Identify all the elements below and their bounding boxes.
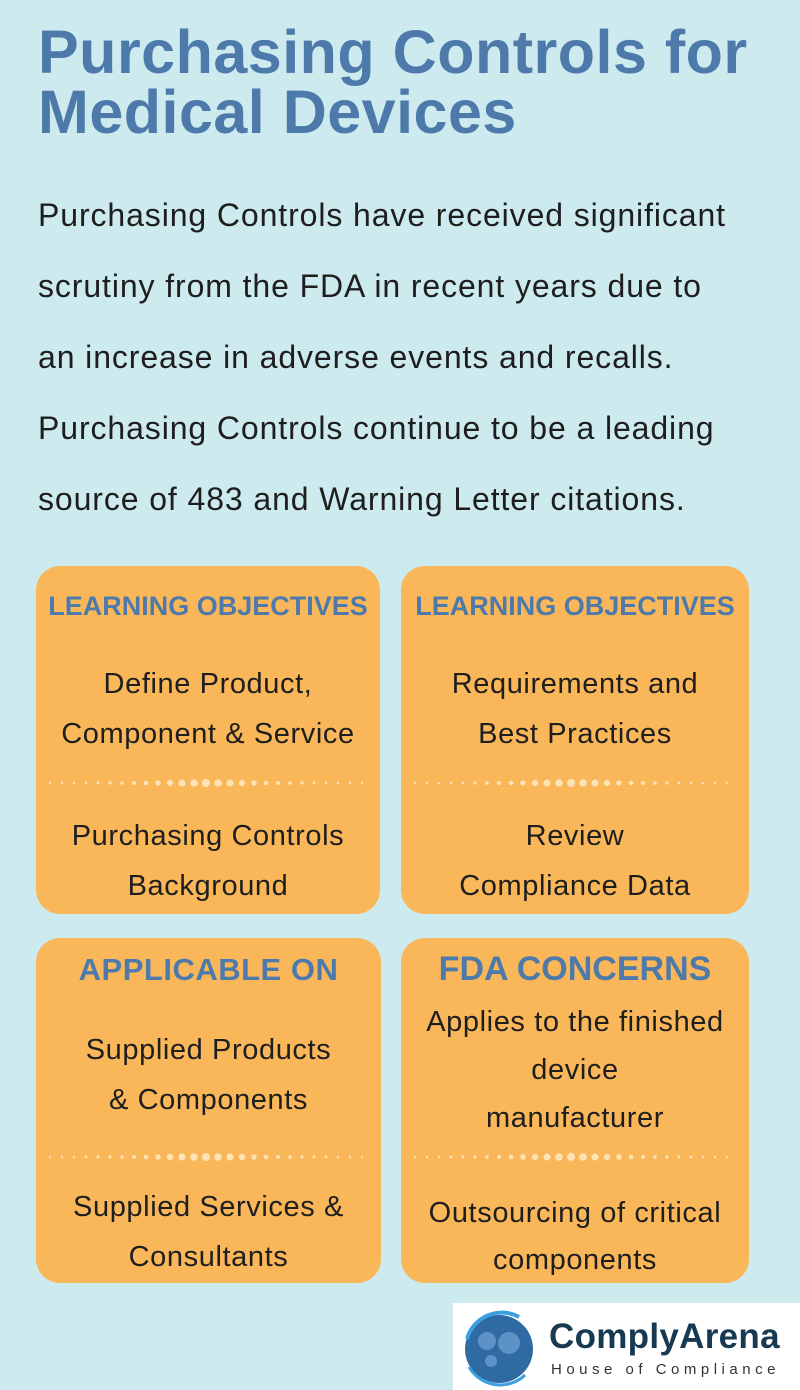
heading: LEARNING OBJECTIVES xyxy=(48,591,368,621)
item: define product: Define Product, xyxy=(104,668,312,700)
intro paragraph: Purchasing Controls continue to be a leading xyxy=(38,410,714,446)
item: supplied services: Consultants xyxy=(129,1241,288,1273)
heading: FDA CONCERNS xyxy=(439,950,711,988)
item: requirements xyxy=(452,668,698,750)
item: finished device xyxy=(426,1006,724,1134)
item: outsourcing xyxy=(429,1197,721,1276)
title xyxy=(38,18,748,146)
title: Medical Devices xyxy=(38,78,517,146)
item: finished device: manufacturer xyxy=(486,1102,664,1134)
panel: learning objectives 1 xyxy=(36,566,380,914)
intro paragraph xyxy=(38,197,726,517)
item: supplied products xyxy=(86,1034,331,1116)
title: Purchasing Controls for xyxy=(38,18,748,86)
item: compliance data: Review xyxy=(526,820,624,852)
intro paragraph: source of 483 and Warning Letter citations. xyxy=(38,481,686,517)
item: outsourcing: Outsourcing of critical xyxy=(429,1197,721,1229)
item: background xyxy=(72,820,344,902)
item: finished device: device xyxy=(531,1054,619,1086)
item: requirements: Best Practices xyxy=(478,718,672,750)
panel: applicable on xyxy=(36,938,381,1283)
item: supplied products: & Components xyxy=(109,1084,308,1116)
intro paragraph: scrutiny from the FDA in recent years due to xyxy=(38,268,702,304)
item: compliance data xyxy=(459,820,691,902)
item: supplied services xyxy=(73,1191,344,1273)
panel: fda concerns xyxy=(401,938,749,1283)
item: define product xyxy=(61,668,355,750)
item: supplied products: Supplied Products xyxy=(86,1034,331,1066)
item: background: Background xyxy=(128,870,288,902)
divider dots xyxy=(49,779,363,787)
logo: ComplyArena: House of Compliance xyxy=(551,1361,780,1378)
item: define product: Component & Service xyxy=(61,718,355,750)
item: requirements: Requirements and xyxy=(452,668,698,700)
intro paragraph: an increase in adverse events and recalls. xyxy=(38,339,673,375)
item: finished device: Applies to the finished xyxy=(426,1006,724,1038)
icon: globe xyxy=(465,1310,533,1386)
item: supplied services: Supplied Services & xyxy=(73,1191,344,1223)
logo: ComplyArena xyxy=(453,1303,800,1390)
intro paragraph: Purchasing Controls have received significant xyxy=(38,197,726,233)
heading: LEARNING OBJECTIVES xyxy=(415,591,735,621)
heading: APPLICABLE ON xyxy=(79,952,338,987)
item: outsourcing: components xyxy=(493,1244,657,1276)
panel: learning objectives 2 xyxy=(401,566,749,914)
logo text: ComplyArena xyxy=(549,1317,780,1356)
item: compliance data: Compliance Data xyxy=(459,870,691,902)
item: background: Purchasing Controls xyxy=(72,820,344,852)
